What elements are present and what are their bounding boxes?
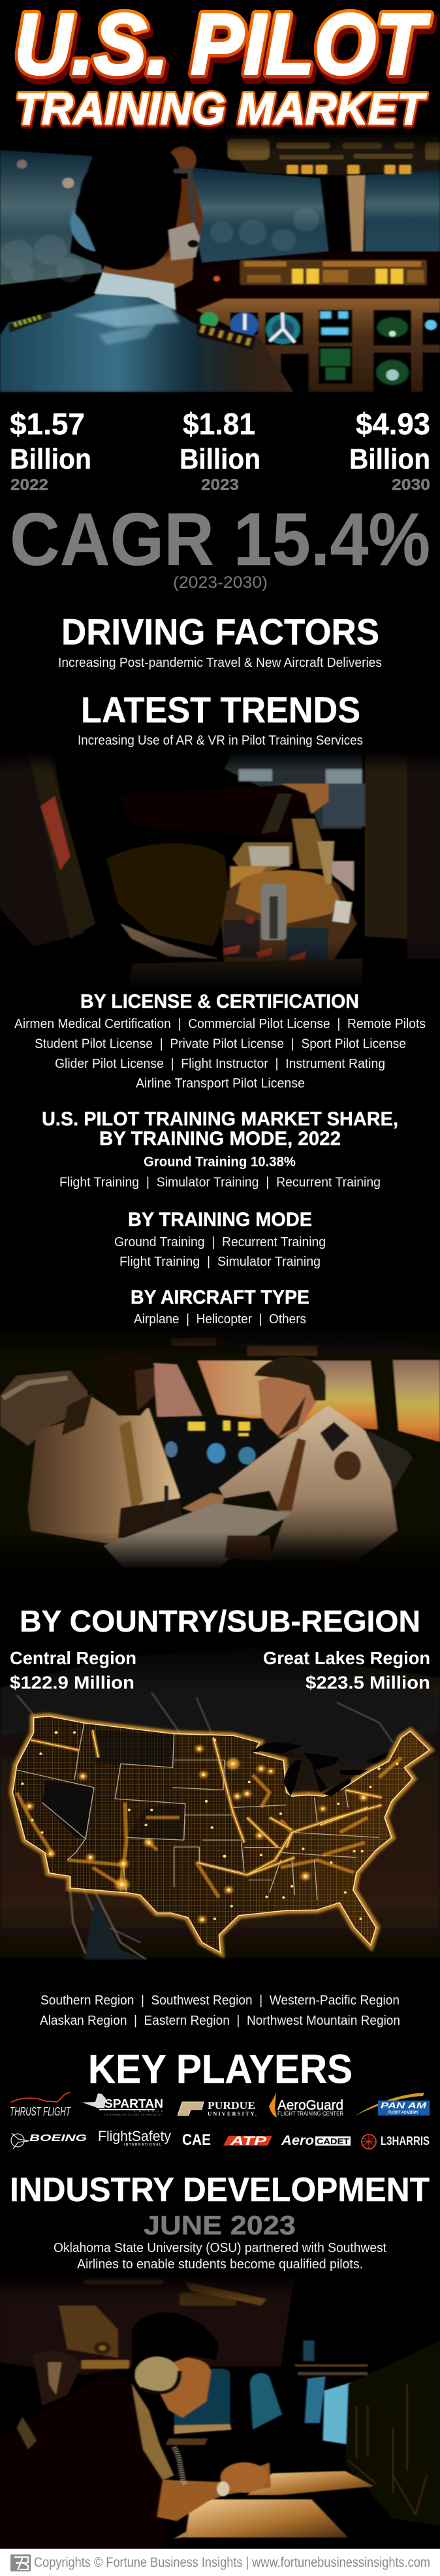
logo: Purdue University: UNIVERSITY. bbox=[208, 2110, 257, 2117]
heading: market share: BY TRAINING MODE, 2022 bbox=[99, 1128, 341, 1150]
development text bbox=[54, 2241, 386, 2272]
market size: 2022: Billion bbox=[10, 443, 91, 475]
other regions list bbox=[40, 1993, 400, 2028]
logo: FlightSafety International: FlightSafety bbox=[98, 2128, 171, 2144]
development text: Oklahoma State University (OSU) partnered with Southwest bbox=[54, 2241, 386, 2255]
icon: Fortune Business Insights logo bbox=[10, 2554, 31, 2571]
license list: Airline Transport Pilot License bbox=[136, 1076, 305, 1091]
market size: 2022: $1.57 bbox=[10, 407, 85, 441]
aircraft type list: Airplane | Helicopter | Others bbox=[134, 1312, 306, 1327]
date: JUNE 2023 bbox=[144, 2210, 296, 2240]
logo: AeroCadet: CADET bbox=[317, 2136, 349, 2146]
market size: 2030 bbox=[349, 407, 430, 494]
photo: pilot in cockpit from behind bbox=[0, 135, 440, 392]
logo: Spartan College bbox=[82, 2093, 163, 2116]
driving factors text: Increasing Post-pandemic Travel & New Aircraft Deliveries bbox=[58, 656, 382, 670]
logo: Pan Am Flight Academy: PAN AM bbox=[381, 2101, 428, 2110]
market size: 2023: 2023 bbox=[201, 476, 239, 494]
photo: throttle quadrant bbox=[0, 751, 440, 989]
market size: 2022: 2022 bbox=[10, 476, 48, 494]
development text: Airlines to enable students become qualified pilots. bbox=[77, 2257, 363, 2272]
market size: 2030: $4.93 bbox=[356, 407, 430, 441]
market size: 2030: 2030 bbox=[392, 476, 430, 494]
market size: 2023: Billion bbox=[180, 443, 260, 475]
central region value bbox=[10, 1648, 136, 1693]
heading: by training mode: BY TRAINING MODE bbox=[128, 1209, 312, 1231]
title: TRAINING MARKET bbox=[15, 84, 427, 134]
training mode list: Flight Training | Simulator Training bbox=[119, 1255, 321, 1269]
heading: by license & certification: BY LICENSE & CERTIFICATION bbox=[80, 991, 359, 1012]
heading: by country/sub-region: BY COUNTRY/SUB-REGION bbox=[20, 1604, 420, 1638]
photo fade top bbox=[0, 1327, 440, 1357]
photo fade bbox=[0, 2273, 440, 2299]
license list: Glider Pilot License | Flight Instructor | Instrument Rating bbox=[55, 1057, 385, 1071]
heading: driving factors: DRIVING FACTORS bbox=[61, 611, 379, 652]
license list: Airmen Medical Certification | Commercial Pilot License | Remote Pilots bbox=[14, 1017, 426, 1031]
map backdrop bbox=[0, 1647, 440, 1959]
great lakes region value: $223.5 Million bbox=[306, 1673, 430, 1693]
logo: L3Harris: L3HARRIS bbox=[381, 2134, 430, 2148]
logo: Thrust Flight: THRUST FLIGHT bbox=[10, 2105, 71, 2118]
license list bbox=[14, 1017, 426, 1091]
title: TRAINING MARKET bbox=[15, 84, 427, 134]
market size: 2022 bbox=[10, 407, 91, 494]
title bbox=[14, 0, 433, 135]
logo: AeroGuard: FLIGHT TRAINING CENTER bbox=[277, 2110, 343, 2117]
logo: Spartan College: OF AERONAUTICS AND TECHNOLOGY bbox=[104, 2114, 163, 2116]
logo: Purdue University bbox=[178, 2099, 257, 2117]
logo: Purdue University: PURDUE bbox=[208, 2099, 255, 2112]
US night map bbox=[0, 1713, 440, 1957]
latest trends text: Increasing Use of AR & VR in Pilot Training Services bbox=[78, 733, 363, 748]
logo: AeroCadet bbox=[281, 2133, 351, 2148]
logo: ATP: ATP bbox=[229, 2134, 268, 2148]
logo: AeroGuard: AeroGuard bbox=[277, 2098, 343, 2113]
ground training share: Ground Training 10.38% bbox=[144, 1155, 296, 1169]
logo: Pan Am Flight Academy bbox=[354, 2093, 430, 2116]
logo: FlightSafety International: INTERNATIONAL bbox=[124, 2143, 161, 2147]
photo fade bbox=[0, 389, 440, 415]
great lakes region value: Great Lakes Region bbox=[263, 1648, 430, 1668]
central region value: $122.9 Million bbox=[10, 1673, 134, 1693]
other regions list: Southern Region | Southwest Region | Western-Pacific Region bbox=[40, 1993, 400, 2008]
great lakes region value bbox=[263, 1648, 430, 1693]
logo: Spartan College: SPARTAN bbox=[104, 2097, 163, 2110]
market size: 2030: Billion bbox=[349, 443, 430, 475]
photo fade bbox=[0, 941, 440, 990]
photo: two pilots reviewing chart bbox=[0, 1330, 440, 1568]
market size: 2023: $1.81 bbox=[183, 407, 255, 441]
photo fade into text bbox=[0, 1956, 440, 1982]
logo: Spartan College: COLLEGE bbox=[134, 2110, 163, 2114]
logo: Boeing: BOEING bbox=[29, 2133, 87, 2144]
training mode list bbox=[114, 1235, 326, 1269]
heading: market share: U.S. PILOT TRAINING MARKET SHARE, bbox=[42, 1108, 398, 1130]
photo fade top bbox=[0, 129, 440, 152]
heading: latest trends: LATEST TRENDS bbox=[81, 689, 360, 730]
photo: pilot studying documents bbox=[0, 2275, 440, 2547]
photo fade bbox=[0, 1532, 440, 1571]
license list: Student Pilot License | Private Pilot License | Sport Pilot License bbox=[35, 1037, 406, 1052]
heading: industry development: INDUSTRY DEVELOPMENT bbox=[10, 2171, 430, 2209]
map backdrop top fade bbox=[0, 1639, 440, 1692]
other regions list: Alaskan Region | Eastern Region | Northwest Mountain Region bbox=[40, 2014, 400, 2028]
training mode list: Ground Training | Recurrent Training bbox=[114, 1235, 326, 1249]
heading: by aircraft type: BY AIRCRAFT TYPE bbox=[131, 1287, 309, 1308]
heading: key players: KEY PLAYERS bbox=[88, 2047, 353, 2092]
central region value: Central Region bbox=[10, 1648, 136, 1668]
CAGR period: (2023-2030) bbox=[173, 573, 268, 592]
footer bar bbox=[0, 2549, 440, 2576]
heading: market share bbox=[42, 1108, 398, 1150]
title: TRAINING MARKET bbox=[16, 85, 428, 135]
share list: Flight Training | Simulator Training | Recurrent Training bbox=[59, 1176, 381, 1190]
logo: L3Harris bbox=[362, 2134, 430, 2149]
logo: Boeing bbox=[11, 2133, 87, 2149]
photo fade top bbox=[0, 751, 440, 772]
logo: Pan Am Flight Academy: FLIGHT ACADEMY bbox=[388, 2111, 418, 2115]
logo: CAE: CAE bbox=[182, 2131, 211, 2149]
logo: AeroCadet: Aero bbox=[281, 2133, 314, 2148]
market size: 2023 bbox=[180, 407, 260, 494]
logo: AeroGuard bbox=[269, 2093, 343, 2117]
logo: ATP bbox=[223, 2134, 272, 2148]
logo: Thrust Flight bbox=[10, 2093, 71, 2118]
